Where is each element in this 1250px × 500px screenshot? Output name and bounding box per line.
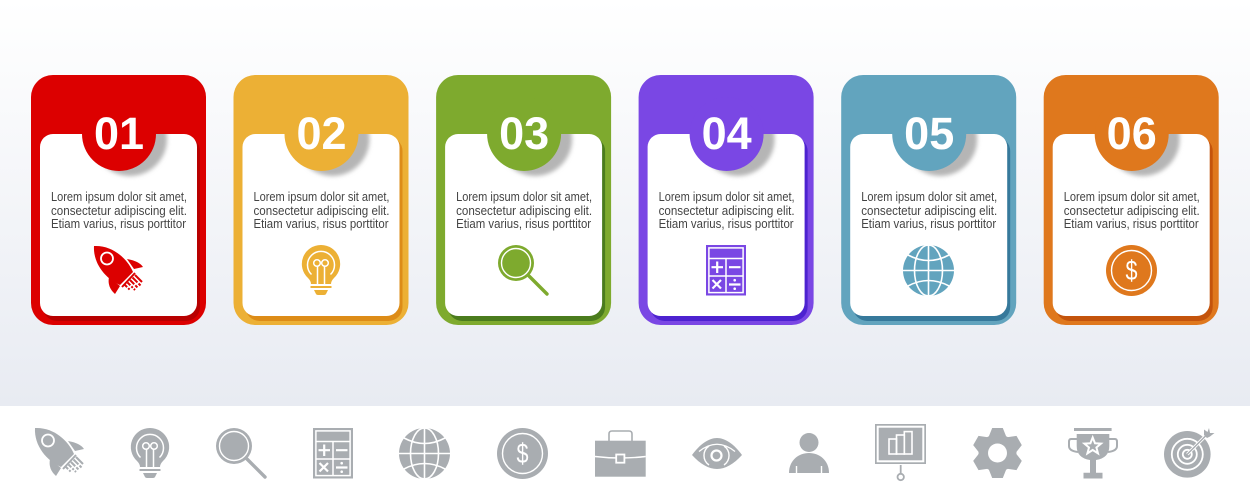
icon: eye — [692, 438, 742, 469]
card 01 — [31, 75, 206, 325]
icon: light bulb — [302, 245, 340, 295]
description 02: Lorem ipsum dolor sit amet, — [254, 190, 390, 204]
icon: dollar coin gray — [497, 428, 548, 479]
description 01: consectetur adipiscing elit. — [51, 204, 187, 218]
description 04: Etiam varius, risus porttitor — [659, 217, 794, 231]
icon: calculator — [706, 245, 746, 296]
card 04 — [639, 75, 814, 325]
icon row — [35, 424, 1215, 480]
description 03: Etiam varius, risus porttitor — [456, 217, 591, 231]
description 06 — [1064, 190, 1200, 231]
icon: magnifier gray — [216, 428, 265, 477]
description 04: consectetur adipiscing elit. — [659, 204, 795, 218]
icon: person — [789, 433, 829, 473]
icon: rocket gray — [35, 428, 84, 476]
card 03 — [436, 75, 611, 325]
description 02: consectetur adipiscing elit. — [254, 204, 390, 218]
icon: presentation board — [875, 424, 926, 480]
description 04 — [659, 190, 795, 231]
card 02 — [234, 75, 408, 325]
description 02: Etiam varius, risus porttitor — [254, 217, 388, 231]
card 06 — [1044, 75, 1219, 325]
description 06: Lorem ipsum dolor sit amet, — [1064, 190, 1200, 204]
icon: dollar coin: $ — [1126, 255, 1138, 286]
icon: magnifier — [498, 245, 547, 294]
number 02: 02 — [296, 108, 347, 159]
card 05 — [841, 75, 1016, 325]
icon: target — [1164, 428, 1214, 478]
number 04: 04 — [702, 108, 752, 159]
description 05: Etiam varius, risus porttitor — [861, 217, 996, 231]
icon: calculator gray — [313, 428, 353, 478]
description 05 — [861, 190, 997, 231]
icon: bulb gray — [131, 428, 169, 478]
icon: briefcase — [595, 431, 646, 477]
description 05: consectetur adipiscing elit. — [861, 204, 997, 218]
description 04: Lorem ipsum dolor sit amet, — [659, 190, 795, 204]
icon: dollar coin — [1106, 245, 1157, 296]
number 03: 03 — [499, 108, 549, 159]
description 05: Lorem ipsum dolor sit amet, — [861, 190, 997, 204]
description 03 — [456, 190, 592, 231]
description 01 — [51, 190, 187, 231]
description 01: Lorem ipsum dolor sit amet, — [51, 190, 187, 204]
icon: rocket — [94, 246, 143, 294]
icon: trophy — [1069, 428, 1117, 478]
icon: globe — [903, 245, 954, 296]
number 01: 01 — [94, 108, 144, 159]
description 03: Lorem ipsum dolor sit amet, — [456, 190, 592, 204]
number 05: 05 — [904, 108, 954, 159]
icon: gear — [972, 428, 1023, 478]
icon: globe gray — [399, 428, 450, 479]
icon: dollar coin gray: $ — [516, 438, 529, 469]
description 06: Etiam varius, risus porttitor — [1064, 217, 1199, 231]
description 06: consectetur adipiscing elit. — [1064, 204, 1200, 218]
description 03: consectetur adipiscing elit. — [456, 204, 592, 218]
description 02 — [254, 190, 390, 231]
description 01: Etiam varius, risus porttitor — [51, 217, 186, 231]
number 06: 06 — [1107, 108, 1157, 159]
